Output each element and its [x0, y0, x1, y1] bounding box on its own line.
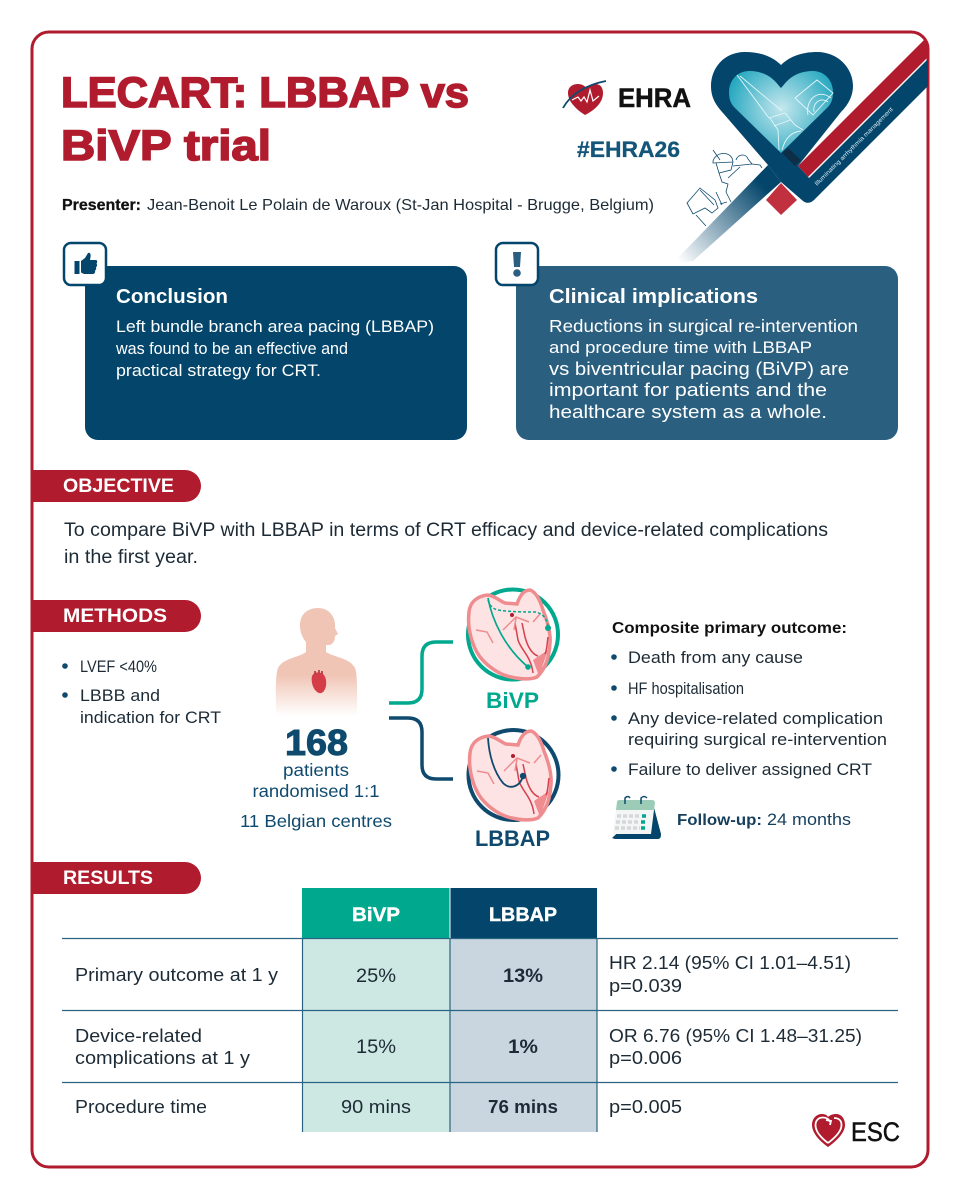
congress heart emblem	[680, 40, 928, 262]
ESC logo	[812, 1114, 900, 1147]
conclusion text	[115, 318, 434, 380]
column: LBBAP: 76 mins	[488, 1097, 558, 1117]
inclusion criteria list: LBBB and	[80, 686, 160, 705]
statistics	[609, 952, 862, 1117]
icon: BiVP heart with leads	[468, 590, 558, 680]
hashtag: #EHRA26	[577, 137, 680, 162]
heading: methods: METHODS	[63, 606, 167, 627]
icon: ESC heart	[812, 1114, 845, 1147]
follow-up: 24 months	[767, 811, 851, 829]
column: LBBAP: 13%	[503, 966, 543, 987]
heading: results	[32, 862, 201, 894]
implications text: and procedure time with LBBAP	[549, 338, 812, 357]
tagline: Illuminating arrhythmia management	[814, 107, 895, 187]
implications text: healthcare system as a whole.	[549, 402, 827, 422]
label: BiVP: BiVP	[486, 688, 539, 713]
column: BiVP	[302, 888, 450, 1132]
conclusion text: Left bundle branch area pacing (LBBAP)	[116, 318, 434, 336]
heading: objective: OBJECTIVE	[63, 476, 174, 497]
patient count	[240, 722, 392, 831]
title: BiVP trial	[61, 122, 271, 170]
label: LBBAP: LBBAP	[475, 826, 550, 851]
red diamond	[766, 183, 797, 215]
patient count: 11 Belgian centres	[240, 811, 392, 831]
EHRA logo	[563, 81, 691, 115]
heading: results: RESULTS	[63, 868, 153, 889]
follow-up	[677, 811, 851, 829]
arrow: to BiVP	[389, 642, 453, 703]
icon: LBBAP heart with lead	[468, 730, 558, 820]
presenter: Jean-Benoit Le Polain de Waroux (St-Jan Hospital - Brugge, Belgium)	[147, 197, 654, 214]
inclusion criteria list: LVEF <40%	[80, 657, 157, 676]
column: LBBAP: LBBAP	[489, 904, 557, 926]
composite primary outcome list: Any device-related complication	[628, 709, 883, 728]
heading: objective	[32, 470, 201, 502]
statistics: p=0.005	[609, 1096, 682, 1117]
column: BiVP: 25%	[356, 966, 396, 987]
follow-up: Follow-up:	[677, 812, 762, 829]
inner heart	[729, 71, 833, 153]
statistics: p=0.039	[609, 975, 682, 996]
statistics: p=0.006	[609, 1047, 682, 1068]
column: LBBAP	[450, 888, 597, 1132]
composite primary outcome list: Composite primary outcome:	[612, 620, 847, 637]
title	[61, 69, 469, 170]
column: BiVP: 15%	[356, 1037, 396, 1058]
row labels: complications at 1 y	[75, 1047, 251, 1068]
icon: thumbs up	[64, 243, 106, 285]
crossing shadow	[782, 148, 801, 166]
landmarks	[737, 75, 833, 150]
row labels: Procedure time	[75, 1097, 207, 1117]
arrow: to LBBAP	[389, 718, 453, 779]
row labels	[75, 964, 279, 1117]
objective text: To compare BiVP with LBBAP in terms of CRT efficacy and device-related complications	[64, 520, 828, 541]
statistics: OR 6.76 (95% CI 1.48–31.25)	[609, 1025, 862, 1046]
fading tail	[672, 165, 781, 264]
ESC logo: ESC	[851, 1117, 900, 1147]
composite primary outcome list: HF hospitalisation	[628, 679, 744, 698]
heading: Conclusion	[116, 286, 228, 308]
panel: conclusion	[64, 243, 467, 440]
column: LBBAP: 1%	[508, 1037, 538, 1058]
inclusion criteria list: indication for CRT	[80, 708, 221, 727]
presenter: Presenter:	[62, 197, 141, 214]
icon: patient silhouette with heart	[276, 608, 357, 716]
patient count: patients	[283, 760, 349, 780]
implications text: vs biventricular pacing (BiVP) are	[549, 359, 849, 379]
column: BiVP: 90 mins	[341, 1097, 411, 1117]
conclusion text: was found to be an effective and	[115, 340, 348, 358]
composite primary outcome list: Failure to deliver assigned CRT	[628, 760, 872, 779]
inclusion criteria list	[62, 657, 221, 727]
objective text	[64, 520, 828, 568]
icon: EHRA heart	[563, 81, 606, 115]
results table	[62, 888, 898, 1132]
objective text: in the first year.	[64, 547, 198, 568]
statistics: HR 2.14 (95% CI 1.01–4.51)	[609, 952, 851, 973]
composite primary outcome list	[611, 620, 887, 779]
city outline	[687, 150, 762, 226]
implications text: Reductions in surgical re-intervention	[549, 316, 858, 336]
implications text	[549, 316, 858, 422]
EHRA logo: EHRA	[618, 83, 691, 113]
heading: methods	[32, 600, 201, 632]
row labels: Primary outcome at 1 y	[75, 964, 279, 985]
icon: calendar	[612, 796, 661, 839]
navy stripe and heart outline	[711, 52, 928, 203]
row labels: Device-related	[75, 1026, 202, 1046]
heading: Clinical implications	[549, 286, 758, 308]
composite primary outcome list: requiring surgical re-intervention	[628, 730, 887, 749]
panel: clinical implications	[496, 243, 898, 440]
patient count: randomised 1:1	[252, 781, 380, 801]
implications text: important for patients and the	[549, 380, 827, 400]
title: LECART: LBBAP vs	[61, 69, 469, 117]
icon: exclamation	[496, 243, 538, 285]
composite primary outcome list: Death from any cause	[628, 648, 803, 667]
column: BiVP: BiVP	[352, 904, 400, 926]
conclusion text: practical strategy for CRT.	[116, 362, 321, 380]
red stripe	[798, 40, 926, 177]
patient count: 168	[285, 722, 348, 763]
